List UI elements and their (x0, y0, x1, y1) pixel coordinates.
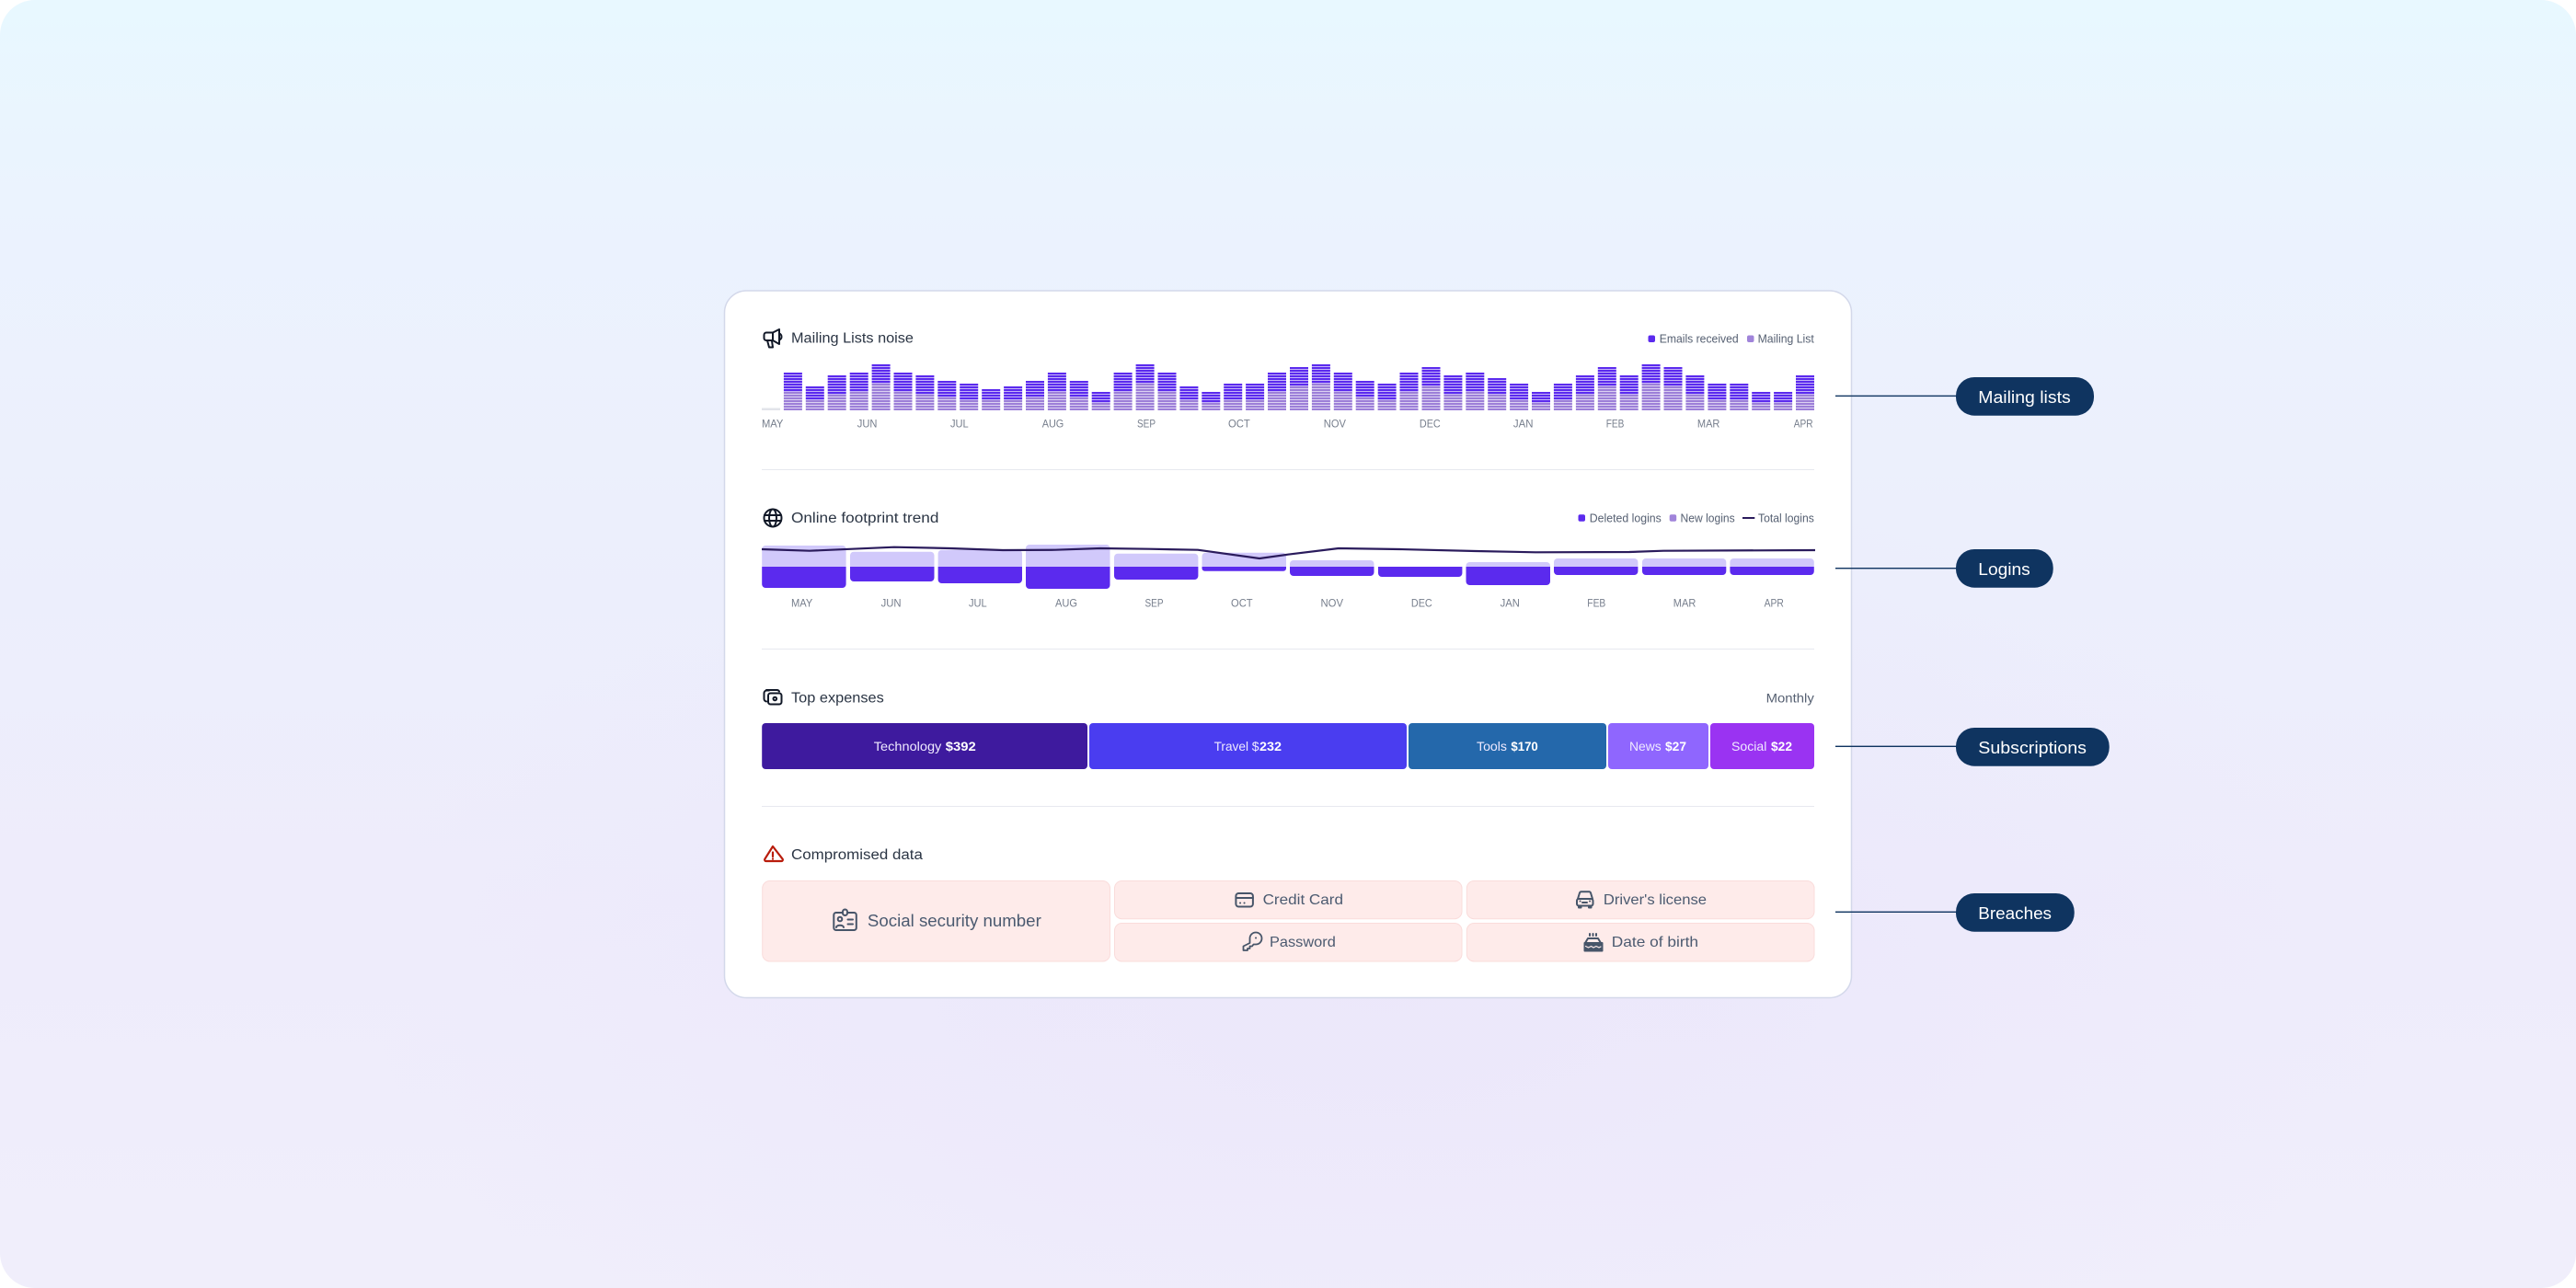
chart axis: months: JUL (969, 596, 987, 609)
callout: mailing lists: Mailing lists (1978, 388, 2071, 407)
breach tile: social security number (763, 881, 1110, 961)
chart axis: months: MAR (1697, 417, 1720, 430)
chart axis: months: JAN (1501, 596, 1520, 609)
stacked bar: travel: $ (1252, 739, 1259, 753)
stacked bar: social: Social (1731, 739, 1766, 753)
stacked bar: travel: 232 (1259, 739, 1282, 753)
chart axis: months: MAY (791, 596, 812, 609)
legend: emails received and mailing list: Mailing List (1758, 332, 1814, 345)
panel: top expenses (762, 690, 1814, 769)
legend: deleted, new and total logins (1579, 512, 1814, 524)
breach tile: password: Password (1270, 935, 1336, 950)
legend: deleted, new and total logins: Total logins (1758, 512, 1814, 524)
chart axis: months (791, 596, 1784, 609)
chart axis: months: AUG (1042, 417, 1064, 430)
panel: compromised data (763, 846, 1814, 961)
panel: dashboard card (725, 291, 1851, 997)
icon: warning triangle (765, 846, 783, 861)
chart axis: months: AUG (1055, 596, 1077, 609)
chart axis: months: APR (1765, 596, 1784, 609)
legend: emails received and mailing list: Emails received (1660, 332, 1739, 345)
breach tile: date of birth (1466, 924, 1814, 961)
chart axis: months: NOV (1324, 417, 1346, 430)
icon: id badge (834, 909, 857, 930)
stacked bar: news: News (1629, 739, 1662, 753)
chart axis: months: APR (1794, 417, 1813, 430)
stacked bar: travel: Travel (1214, 739, 1248, 753)
chart: new logins light bars (762, 545, 1814, 567)
stacked bar: travel (1089, 723, 1407, 769)
stacked bar: tools: $170 (1511, 739, 1538, 753)
chart axis: months: SEP (1137, 417, 1156, 430)
chart axis: months: JUN (881, 596, 902, 609)
chart axis: months: FEB (1606, 417, 1624, 430)
stacked bar: social: $22 (1771, 739, 1792, 753)
chart axis: months: MAY (762, 417, 783, 430)
heading: compromised data: Compromised data (791, 847, 923, 863)
breach tile: driver's license (1466, 881, 1814, 919)
breach tile: credit card: Credit Card (1263, 892, 1343, 908)
breach tile: social security number: Social security number (868, 912, 1041, 930)
icon: banknotes (764, 690, 782, 705)
panel: mailing lists noise (762, 329, 1814, 430)
chart axis: months (762, 417, 1813, 430)
breach tile: date of birth: Date of birth (1612, 935, 1698, 950)
callout: breaches: Breaches (1978, 904, 2052, 923)
stacked bar: technology: Technology (874, 739, 941, 753)
chart axis: months: SEP (1144, 596, 1163, 609)
callout: logins: Logins (1978, 560, 2030, 579)
stacked bar: tools (1409, 723, 1606, 769)
chart axis: months: OCT (1228, 417, 1250, 430)
callout: subscriptions: Subscriptions (1978, 739, 2087, 757)
callout: mailing lists (1835, 377, 2094, 416)
icon: credit card (1236, 893, 1253, 907)
chart axis: months: JAN (1513, 417, 1533, 430)
heading: online footprint trend: Online footprint trend (791, 511, 938, 526)
chart axis: months: NOV (1321, 596, 1343, 609)
callout: breaches (1835, 893, 2075, 932)
heading: top expenses: Top expenses (791, 690, 884, 707)
callout: logins (1835, 549, 2053, 588)
breach tile: password (1115, 924, 1462, 961)
stacked bar: news (1608, 723, 1708, 769)
legend: deleted, new and total logins: Deleted logins (1590, 512, 1662, 524)
icon: globe (764, 510, 782, 526)
heading: mailing lists noise: Mailing Lists noise (791, 331, 914, 346)
breach tile: driver's license: Driver's license (1604, 892, 1707, 908)
icon: megaphone (764, 329, 782, 348)
panel: online footprint trend (762, 510, 1815, 609)
chart axis: months: JUN (857, 417, 878, 430)
callout: subscriptions (1835, 728, 2110, 766)
label: monthly: Monthly (1766, 690, 1814, 705)
chart axis: months: MAR (1673, 596, 1696, 609)
stacked bar: news: $27 (1665, 739, 1686, 753)
legend: deleted, new and total logins: New logins (1680, 512, 1735, 524)
breach tile: credit card (1115, 881, 1462, 919)
stacked bar: social (1710, 723, 1814, 769)
stacked bar: tools: Tools (1477, 739, 1507, 753)
chart axis: months: DEC (1411, 596, 1432, 609)
chart axis: months: JUL (950, 417, 969, 430)
icon: key (1244, 933, 1262, 950)
chart axis: months: FEB (1587, 596, 1605, 609)
stacked bar: technology (762, 723, 1087, 769)
stacked bar: technology: $392 (946, 739, 976, 753)
chart: total logins line (762, 547, 1815, 558)
chart: deleted logins dark bars (762, 567, 1814, 589)
icon: birthday cake (1584, 934, 1603, 951)
chart axis: months: OCT (1231, 596, 1253, 609)
icon: car (1577, 891, 1593, 907)
chart: stacked segmented bars (762, 364, 1814, 410)
legend: emails received and mailing list (1649, 332, 1814, 345)
chart axis: months: DEC (1420, 417, 1441, 430)
